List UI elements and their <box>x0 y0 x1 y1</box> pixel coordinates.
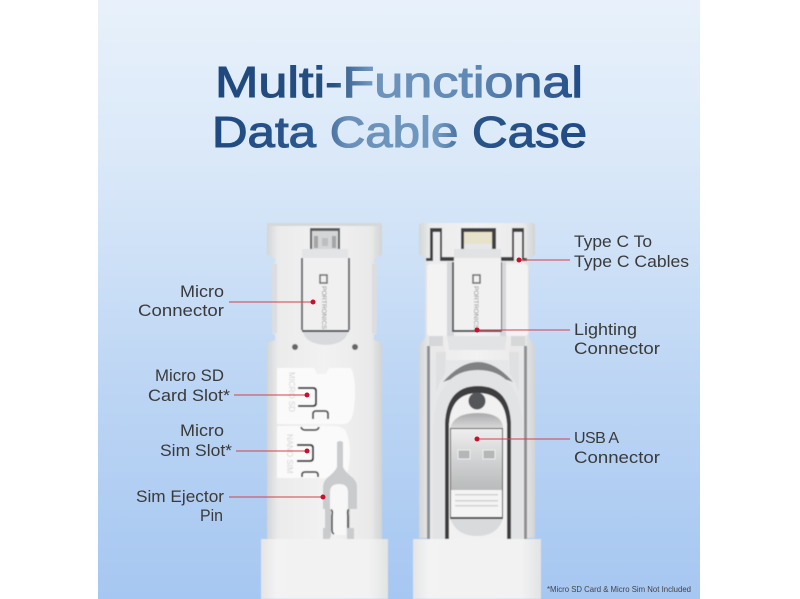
cap slots <box>426 228 527 261</box>
callout: sim ejector pin <box>136 488 326 525</box>
micro sim tray <box>277 426 350 478</box>
right device: lightning connector side <box>413 223 541 599</box>
sim ejector pin <box>323 441 357 539</box>
callout: type C cables: Type C Cables <box>574 253 689 271</box>
callout: micro sim slot: Micro <box>180 422 224 440</box>
callout: sim ejector pin: Pin <box>200 507 223 525</box>
callout: USB A connector <box>474 430 661 467</box>
title: Data Cable Case <box>212 108 587 157</box>
micro sim tray: NANO SIM <box>285 434 294 474</box>
callout: micro SD card slot: Micro SD <box>155 367 224 385</box>
callout: micro sim slot <box>160 422 310 460</box>
callout: micro SD card slot <box>148 367 310 405</box>
brand text: PORTRONICS <box>320 286 327 330</box>
callout: micro sim slot: Sim Slot* <box>160 442 233 460</box>
lightning connector <box>454 228 501 332</box>
title <box>212 58 587 157</box>
left cable <box>427 264 447 360</box>
left device: micro connector side <box>261 223 388 599</box>
callout: USB A connector: Connector <box>574 449 661 467</box>
callout: type C cables: Type C To <box>574 233 652 251</box>
callout: sim ejector pin: Sim Ejector <box>136 488 225 506</box>
case body <box>267 223 382 539</box>
callout: micro connector: Connector <box>138 302 225 320</box>
callout: lightning connector: Lighting <box>574 321 637 339</box>
case base <box>413 539 541 599</box>
USB A connector <box>450 413 503 536</box>
case body <box>419 223 535 538</box>
footnote: *Micro SD Card & Micro Sim Not Included <box>547 585 691 594</box>
callout: lightning connector: Connector <box>574 340 661 358</box>
case base <box>261 539 388 599</box>
background panel <box>98 0 700 599</box>
callout: micro connector: Micro <box>180 283 224 301</box>
right cable <box>506 264 528 360</box>
lightning connector: PORTRONICS <box>472 286 479 330</box>
micro SD tray <box>277 368 355 424</box>
screw holes <box>292 344 298 350</box>
screw hole <box>468 392 486 410</box>
brand logo <box>320 275 327 283</box>
callout: lightning connector <box>474 321 661 358</box>
title: Multi-Functional <box>215 58 583 107</box>
centre channel lines <box>447 262 506 336</box>
micro connector plug <box>301 228 350 345</box>
callout: type C cables <box>516 233 689 271</box>
callout: USB A connector: USB A <box>574 430 619 447</box>
callout: micro SD card slot: Card Slot* <box>148 387 231 405</box>
cable loop <box>427 346 527 539</box>
micro SD tray: MICRO SD <box>287 372 296 412</box>
callout: micro connector <box>138 283 316 320</box>
